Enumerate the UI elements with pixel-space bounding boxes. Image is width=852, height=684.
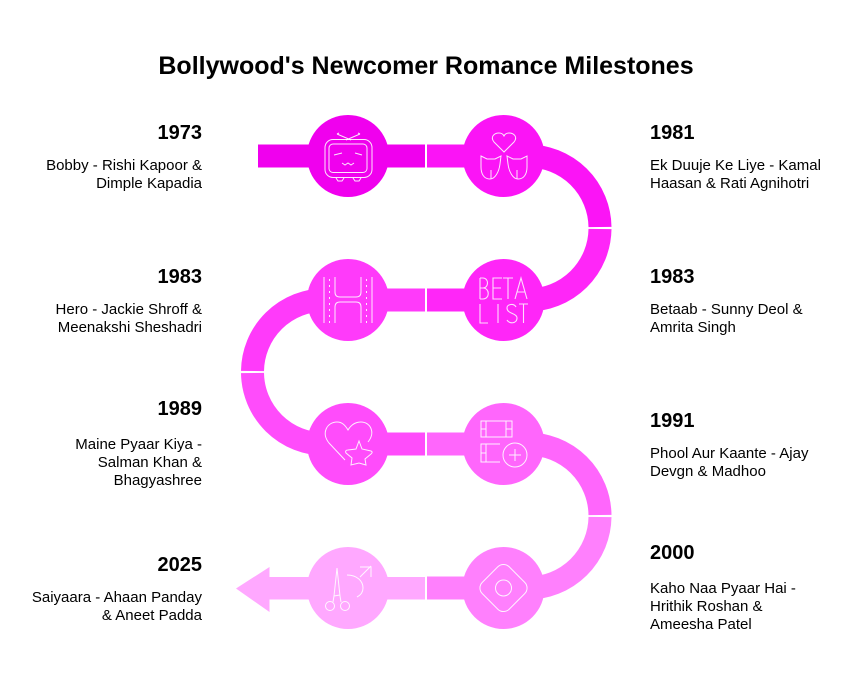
entry: 1981: Ek Duuje Ke Liye - Kamal <box>650 156 821 174</box>
segment 5: 1989 <box>252 373 425 485</box>
entry: 1989: 1989 <box>158 398 202 420</box>
icon: beta list <box>480 278 528 323</box>
segment 8: 2025 with arrow <box>236 547 425 629</box>
segment 4: 1983 Hero <box>252 259 425 371</box>
entry: 2000: Ameesha Patel <box>650 616 752 633</box>
entry: 2025: 2025 <box>158 554 202 576</box>
entry: 1981: 1981 <box>650 122 694 144</box>
entry: 2025: Saiyaara - Ahaan Panday <box>32 588 202 606</box>
entry: 1983 Betaab: Amrita Singh <box>650 319 736 336</box>
icon: diamond <box>477 561 530 615</box>
entry: 2000: 2000 <box>650 542 694 564</box>
entry: 1989: Bhagyashree <box>114 472 202 489</box>
entry: 1991: Phool Aur Kaante - Ajay <box>650 444 808 462</box>
icon: scissors and male symbol <box>326 566 371 610</box>
entry: 1983 Hero: 1983 <box>158 266 202 288</box>
entry: 1991: Devgn & Madhoo <box>650 463 766 480</box>
entry: 1973: Dimple Kapadia <box>96 175 202 192</box>
segment 2: 1981 <box>427 115 600 227</box>
icon: tv <box>325 133 372 181</box>
entry: 1981: Haasan & Rati Agnihotri <box>650 175 809 192</box>
title: Bollywood's Newcomer Romance Milestones <box>158 52 694 80</box>
segment 1: 1973 <box>258 115 425 197</box>
entry: 2025 <box>32 554 202 624</box>
entry: 1989: Salman Khan & <box>98 454 202 471</box>
entry: 1983 Betaab: Betaab - Sunny Deol & <box>650 300 803 318</box>
entry: 1989 <box>75 398 202 489</box>
entry: 1973 <box>46 122 202 192</box>
entry: 2000: Kaho Naa Pyaar Hai - <box>650 580 796 596</box>
entry: 1973: 1973 <box>158 122 202 144</box>
segment 7: 2000 <box>427 517 600 629</box>
icon: heart and star <box>325 422 372 465</box>
segment 3: 1983 Betaab <box>427 229 600 341</box>
entry: 1983 Betaab: 1983 <box>650 266 694 288</box>
entry: 1973: Bobby - Rishi Kapoor & <box>46 156 202 174</box>
entry: 1991: 1991 <box>650 410 694 432</box>
entry: 1991 <box>650 410 808 480</box>
entry: 1983 Hero: Hero - Jackie Shroff & <box>56 300 202 318</box>
entry: 1981 <box>650 122 821 192</box>
icon: film plus <box>481 421 527 467</box>
icon: cats and heart <box>481 133 527 179</box>
segment 6: 1991 <box>427 403 600 515</box>
entry: 2000 <box>650 542 796 633</box>
entry: 2025: & Aneet Padda <box>102 607 202 624</box>
entry: 2000: Hrithik Roshan & <box>650 598 763 615</box>
entry: 1983 Hero <box>56 266 202 336</box>
entry: 1983 Betaab <box>650 266 803 336</box>
icon: film H <box>324 277 372 323</box>
entry: 1989: Maine Pyaar Kiya - <box>75 436 202 452</box>
entry: 1983 Hero: Meenakshi Sheshadri <box>58 319 202 336</box>
